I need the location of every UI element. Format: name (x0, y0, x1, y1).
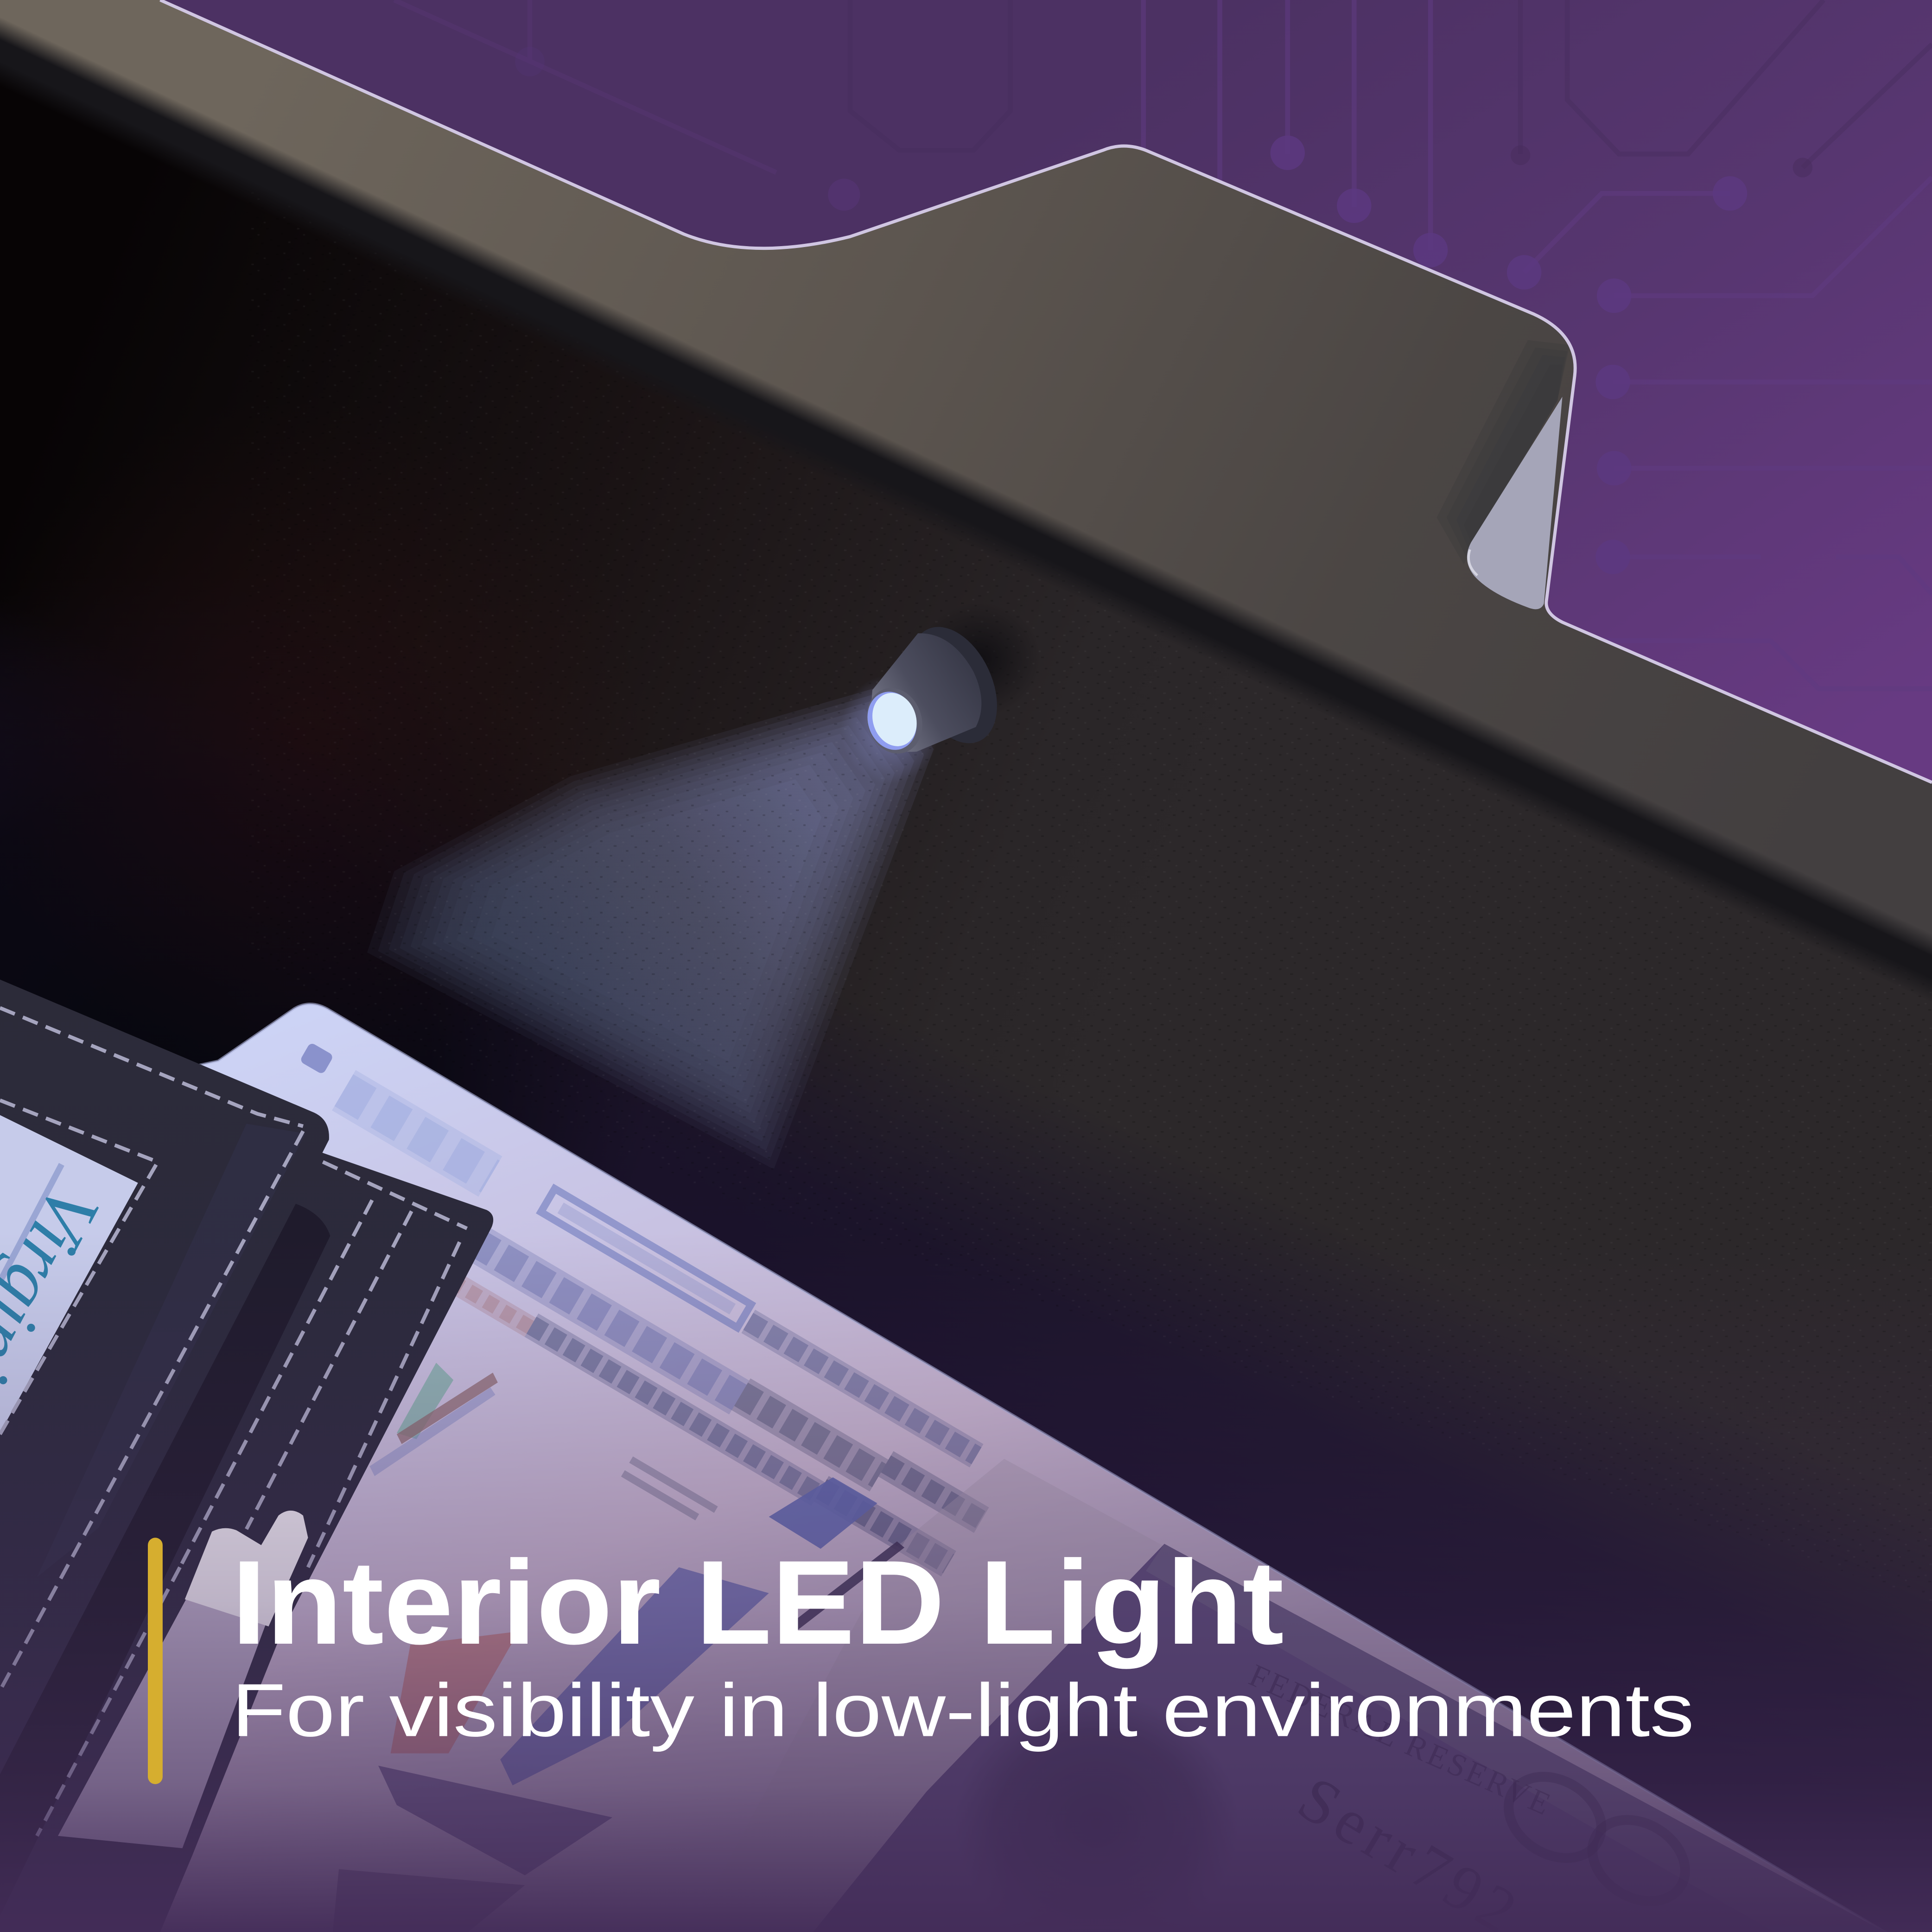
treasury seal (1493, 1760, 1700, 1918)
subtitle: For visibility in low-light environments (232, 1668, 1694, 1752)
wallet slot (0, 1204, 330, 1916)
banknote colour marks (333, 1363, 769, 1932)
facet highlight (1468, 550, 1477, 575)
LED lens glow ring (860, 685, 924, 756)
banknote corner mark (299, 1042, 334, 1075)
title: Interior LED Light (232, 1536, 1284, 1670)
treasury text on note: FEDERAL RESERVE (1244, 1657, 1558, 1823)
wallet front cover (0, 979, 329, 1861)
ID card guilloche line (0, 1164, 62, 1281)
LED light (840, 603, 1041, 784)
bottom purple gradient overlay (0, 1232, 1932, 1932)
circuit board pattern (394, 0, 1932, 689)
wallet front cover inner panel (37, 1124, 305, 1577)
LED flange (893, 613, 1014, 757)
silver side facet (1467, 397, 1563, 609)
accent bar (148, 1538, 163, 1784)
near-black shadow on left (0, 567, 653, 1552)
light note inside wallet (58, 1599, 268, 1848)
soft underlays for print rows (344, 1090, 490, 1176)
shadowed lower wall (0, 597, 1932, 1932)
second note darker region (813, 1544, 1885, 1932)
LED lens rim (858, 681, 931, 761)
LED housing (870, 633, 981, 752)
bezel top edge highlight (160, 0, 1932, 782)
banknote printed bands (248, 1071, 1017, 1642)
heading block (232, 1536, 1694, 1752)
bezel lower shadow band (0, 0, 1932, 1047)
mauve fold of note (690, 1459, 1164, 1932)
note border strip (1146, 1544, 1885, 1932)
dark fold shadow (1436, 340, 1570, 564)
banknote (0, 1004, 1885, 1932)
LED halo (840, 675, 939, 784)
device bezel (0, 0, 1932, 1047)
portrait shadow (955, 1694, 1238, 1932)
ID window (0, 1115, 138, 1433)
shadow behind LED (918, 603, 1041, 716)
LED lens (866, 687, 923, 752)
wallet (0, 979, 493, 1932)
light beam from LED (367, 684, 934, 1169)
oversized blurred serial letters (344, 1090, 490, 1176)
dark crease (788, 1541, 904, 1631)
wallet tab (185, 1511, 308, 1627)
faint red reflection (0, 394, 653, 1084)
wallet back flap (0, 1152, 493, 1932)
wallet stitching (0, 1008, 467, 1836)
panel texture (247, 160, 1932, 1602)
blue square on note (769, 1477, 877, 1549)
